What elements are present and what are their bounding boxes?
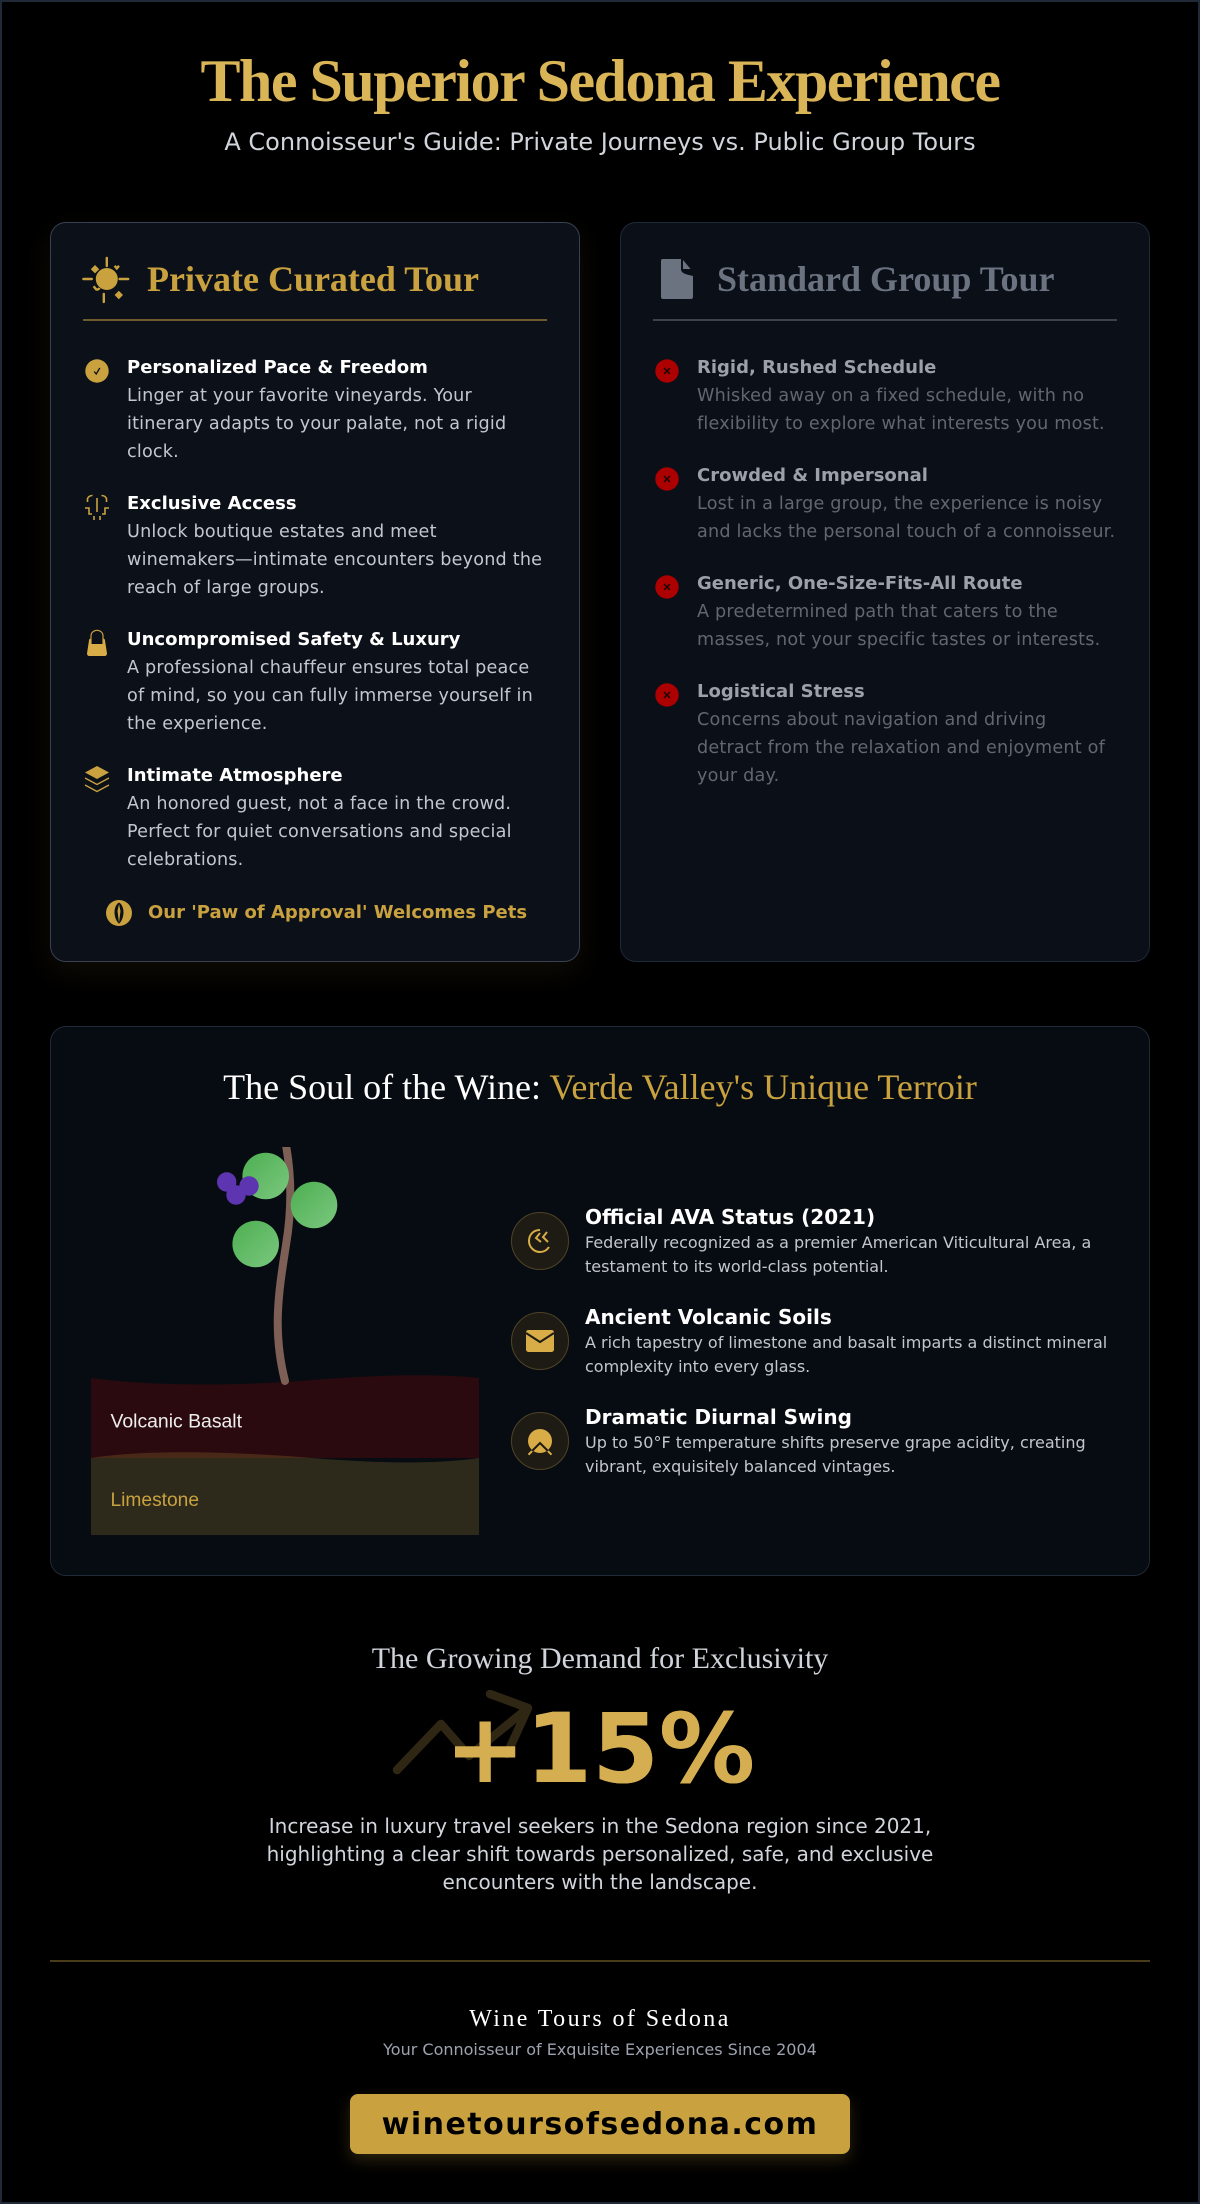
text: exclusive access: Exclusive Access	[127, 493, 297, 514]
text: intimate atmosphere: An honored guest, not a face in the crowd.	[127, 794, 511, 814]
text: pets welcome: Our 'Paw of Approval' Welcomes Pets	[148, 902, 527, 923]
text: personalized pace: itinerary adapts to your palate, not a rigid	[127, 414, 506, 434]
item: intimate atmosphere	[84, 765, 512, 870]
stat description: highlighting a clear shift towards personalized, safe, and exclusive	[267, 1842, 933, 1866]
text: volcanic soils: A rich tapestry of limestone and basalt imparts a distinct mineral	[585, 1333, 1107, 1352]
leaves	[232, 1153, 337, 1267]
text: diurnal swing: Up to 50°F temperature shifts preserve grape acidity, creating	[585, 1433, 1086, 1452]
text: rigid schedule: Rigid, Rushed Schedule	[697, 357, 936, 378]
icon: x mark	[655, 683, 679, 707]
text: rigid schedule: flexibility to explore what interests you most.	[697, 414, 1105, 434]
heading: terroir: The Soul of the Wine: Verde Valley's Unique Terroir	[223, 1067, 977, 1107]
icon: x mark	[655, 575, 679, 599]
text: logistical stress: your day.	[697, 766, 779, 786]
heading: private curated tour: Private Curated Tour	[147, 259, 479, 299]
stat description: Increase in luxury travel seekers in the Sedona region since 2021,	[269, 1814, 931, 1838]
text: exclusive access: winemakers—intimate encounters beyond the	[127, 550, 542, 570]
panel: private curated tour	[50, 222, 580, 962]
text: logistical stress	[697, 681, 1106, 786]
item: logistical stress	[655, 681, 1106, 786]
text: safety and luxury: of mind, so you can fully immerse yourself in	[127, 686, 533, 706]
text: crowded	[697, 465, 1115, 542]
icon: paw	[106, 900, 132, 926]
big number	[0, 1693, 1200, 1805]
text: exclusive access: reach of large groups.	[127, 578, 325, 598]
icon: mountain sun	[511, 1412, 569, 1470]
text: intimate atmosphere: celebrations.	[127, 850, 243, 870]
text: crowded: Lost in a large group, the experience is noisy	[697, 494, 1102, 514]
text: rigid schedule: Whisked away on a fixed schedule, with no	[697, 386, 1084, 406]
soil layer: limestone: Limestone	[110, 1490, 199, 1511]
title: The Superior Sedona Experience	[201, 48, 999, 114]
diagram: vine and soil layers	[91, 1147, 479, 1535]
footer divider	[50, 1960, 1150, 1962]
footer tagline: Your Connoisseur of Exquisite Experiences Since 2004	[383, 2040, 817, 2059]
icon: lock	[87, 630, 107, 656]
text: logistical stress: Logistical Stress	[697, 681, 865, 702]
text: personalized pace	[127, 357, 506, 462]
icon: x mark	[655, 359, 679, 383]
text: safety and luxury: A professional chauffeur ensures total peace	[127, 658, 529, 678]
icon: envelope	[511, 1312, 569, 1370]
soil layer: basalt: Volcanic Basalt	[110, 1410, 243, 1432]
divider	[83, 319, 547, 321]
text: intimate atmosphere: Perfect for quiet conversations and special	[127, 822, 512, 842]
icon: sun	[82, 256, 130, 304]
text: personalized pace: Linger at your favorite vineyards. Your	[127, 386, 472, 406]
item: rigid schedule	[655, 357, 1105, 434]
text: safety and luxury: Uncompromised Safety & Luxury	[127, 629, 460, 650]
text: AVA status	[585, 1205, 1091, 1276]
text: diurnal swing: Dramatic Diurnal Swing	[585, 1405, 852, 1429]
text: AVA status: Official AVA Status (2021)	[585, 1205, 875, 1229]
call to action button: winetoursofsedona.com	[382, 2107, 818, 2142]
text: personalized pace: clock.	[127, 442, 179, 462]
panel: terroir	[50, 1026, 1150, 1576]
vine stem	[278, 1140, 290, 1381]
icon: document	[661, 259, 693, 299]
footer brand: Wine Tours of Sedona	[469, 2006, 731, 2032]
big number: +15%	[445, 1693, 755, 1805]
fact: volcanic soils	[511, 1305, 1107, 1376]
item: generic route	[655, 573, 1100, 650]
icon: exclusive access	[85, 494, 109, 520]
callout: pets welcome	[106, 900, 527, 926]
text: AVA status: testament to its world-class potential.	[585, 1257, 889, 1276]
icon: AVA badge	[511, 1212, 569, 1270]
soil layer: basalt	[91, 1375, 479, 1458]
text: volcanic soils	[585, 1305, 1107, 1376]
text: volcanic soils: Ancient Volcanic Soils	[585, 1305, 832, 1329]
soil layer: limestone	[91, 1452, 479, 1535]
icon: layers	[84, 766, 110, 792]
panel: standard group tour	[620, 222, 1150, 962]
text: generic route: Generic, One-Size-Fits-All Route	[697, 573, 1023, 594]
text: personalized pace: Personalized Pace & Freedom	[127, 357, 428, 378]
stat description	[0, 1812, 1200, 1896]
text: generic route: masses, not your specific tastes or interests.	[697, 630, 1100, 650]
text: exclusive access	[127, 493, 542, 598]
item: personalized pace	[85, 357, 506, 462]
text: safety and luxury: the experience.	[127, 714, 268, 734]
icon: trend arrow	[392, 1690, 532, 1774]
text: safety and luxury	[127, 629, 533, 734]
text: intimate atmosphere: Intimate Atmosphere	[127, 765, 343, 786]
text: diurnal swing	[585, 1405, 1086, 1476]
text: AVA status: Federally recognized as a premier American Viticultural Area, a	[585, 1233, 1091, 1252]
text: logistical stress: detract from the relaxation and enjoyment of	[697, 738, 1105, 758]
fact: AVA status	[511, 1205, 1091, 1276]
text: diurnal swing: vibrant, exquisitely balanced vintages.	[585, 1457, 896, 1476]
item: crowded	[655, 465, 1115, 542]
text: volcanic soils: complexity into every glass.	[585, 1357, 810, 1376]
item: exclusive access	[85, 493, 542, 598]
text: generic route: A predetermined path that caters to the	[697, 602, 1058, 622]
item: safety and luxury	[87, 629, 533, 734]
grapes	[217, 1172, 259, 1205]
divider	[653, 319, 1117, 321]
text: rigid schedule	[697, 357, 1105, 434]
subtitle: A Connoisseur's Guide: Private Journeys vs. Public Group Tours	[224, 128, 976, 156]
stat description: encounters with the landscape.	[443, 1870, 757, 1894]
text: exclusive access: Unlock boutique estates and meet	[127, 522, 437, 542]
call to action button	[350, 2094, 850, 2154]
text: crowded: and lacks the personal touch of a connoisseur.	[697, 522, 1115, 542]
fact: diurnal swing	[511, 1405, 1086, 1476]
text: intimate atmosphere	[127, 765, 512, 870]
heading: growing demand: The Growing Demand for Exclusivity	[372, 1642, 828, 1675]
text: logistical stress: Concerns about navigation and driving	[697, 710, 1046, 730]
heading: standard group tour: Standard Group Tour	[717, 259, 1054, 299]
icon: check	[85, 359, 109, 383]
text: generic route	[697, 573, 1100, 650]
icon: x mark	[655, 467, 679, 491]
text: crowded: Crowded & Impersonal	[697, 465, 928, 486]
